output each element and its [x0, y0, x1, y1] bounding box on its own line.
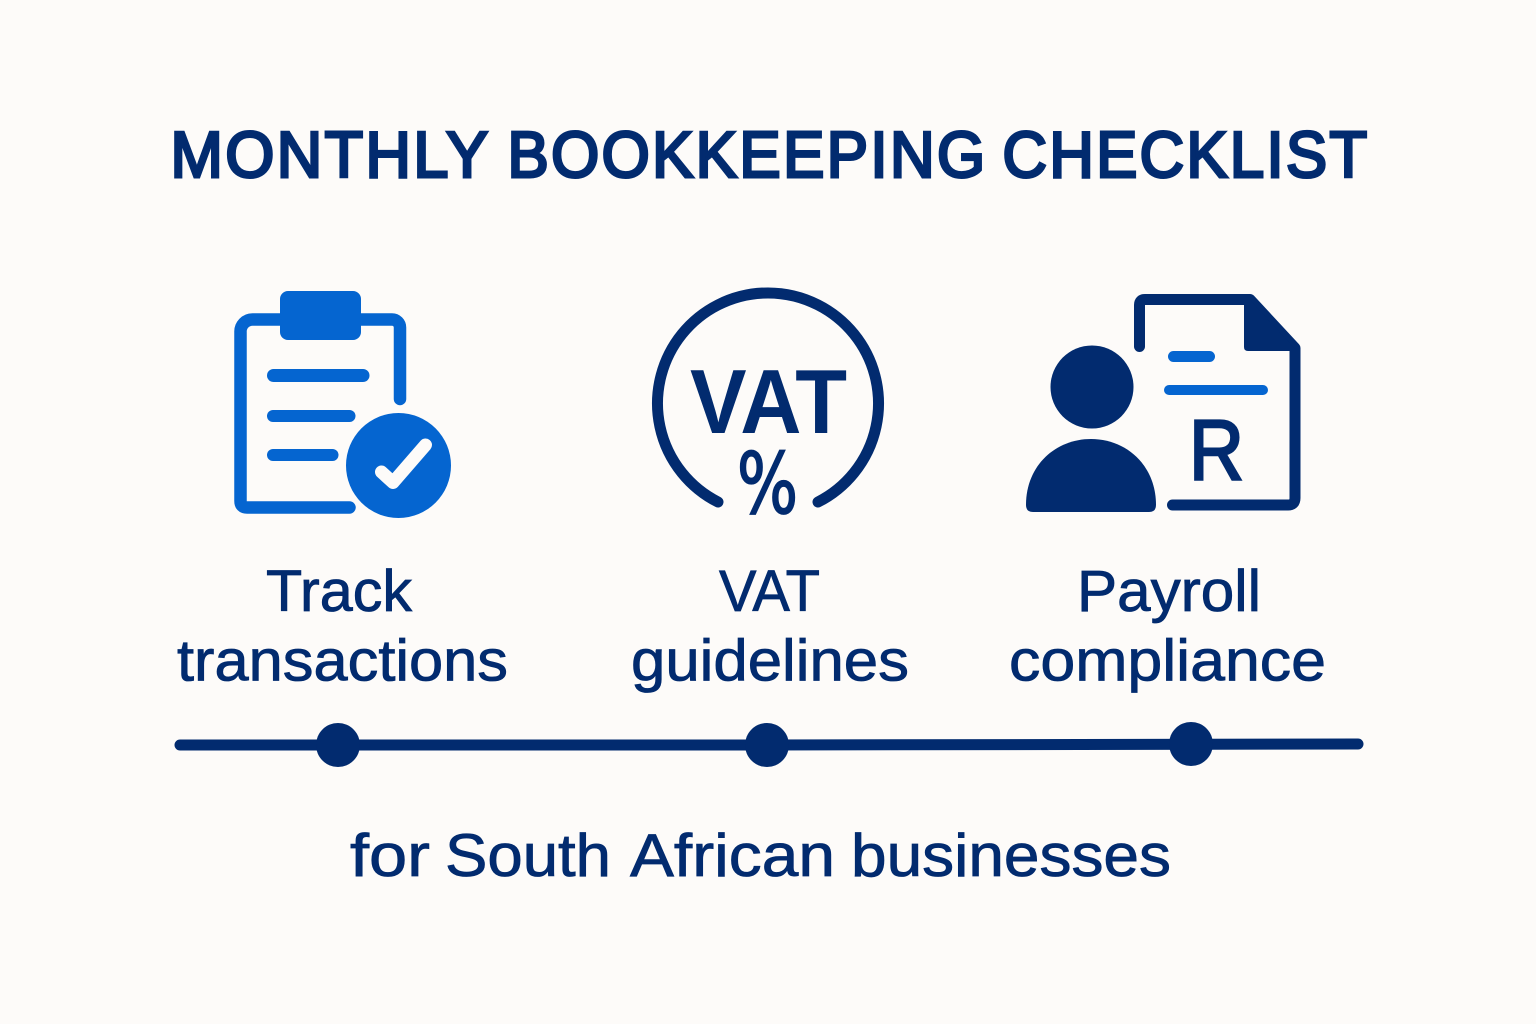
title — [170, 119, 1370, 191]
subtitle: South — [445, 822, 611, 889]
label: track transactions: transactions — [177, 628, 508, 694]
label: payroll compliance: Payroll — [1077, 559, 1261, 624]
title: CHECKLIST — [1002, 119, 1370, 191]
label: payroll compliance: compliance — [1009, 628, 1326, 694]
icon: payroll person and document: R — [1189, 404, 1244, 498]
title: MONTHLY — [170, 119, 490, 191]
icon: VAT percent badge: % — [737, 436, 798, 534]
label: track transactions: Track — [266, 559, 413, 624]
subtitle: African — [630, 822, 835, 889]
label: payroll compliance — [1009, 559, 1326, 694]
title: BOOKKEEPING — [508, 119, 988, 191]
label: VAT guidelines: guidelines — [631, 628, 909, 694]
subtitle: businesses — [851, 822, 1171, 889]
icon: VAT percent badge — [658, 293, 878, 534]
icon: clipboard with check — [240, 291, 451, 518]
icon: payroll person and document — [1026, 300, 1296, 512]
label: VAT guidelines — [631, 559, 909, 694]
icon: VAT percent badge: VAT — [690, 352, 847, 453]
label: track transactions — [177, 559, 508, 694]
subtitle: for — [350, 822, 430, 889]
label: VAT guidelines: VAT — [719, 559, 820, 624]
subtitle — [350, 822, 1171, 889]
timeline — [180, 722, 1358, 767]
